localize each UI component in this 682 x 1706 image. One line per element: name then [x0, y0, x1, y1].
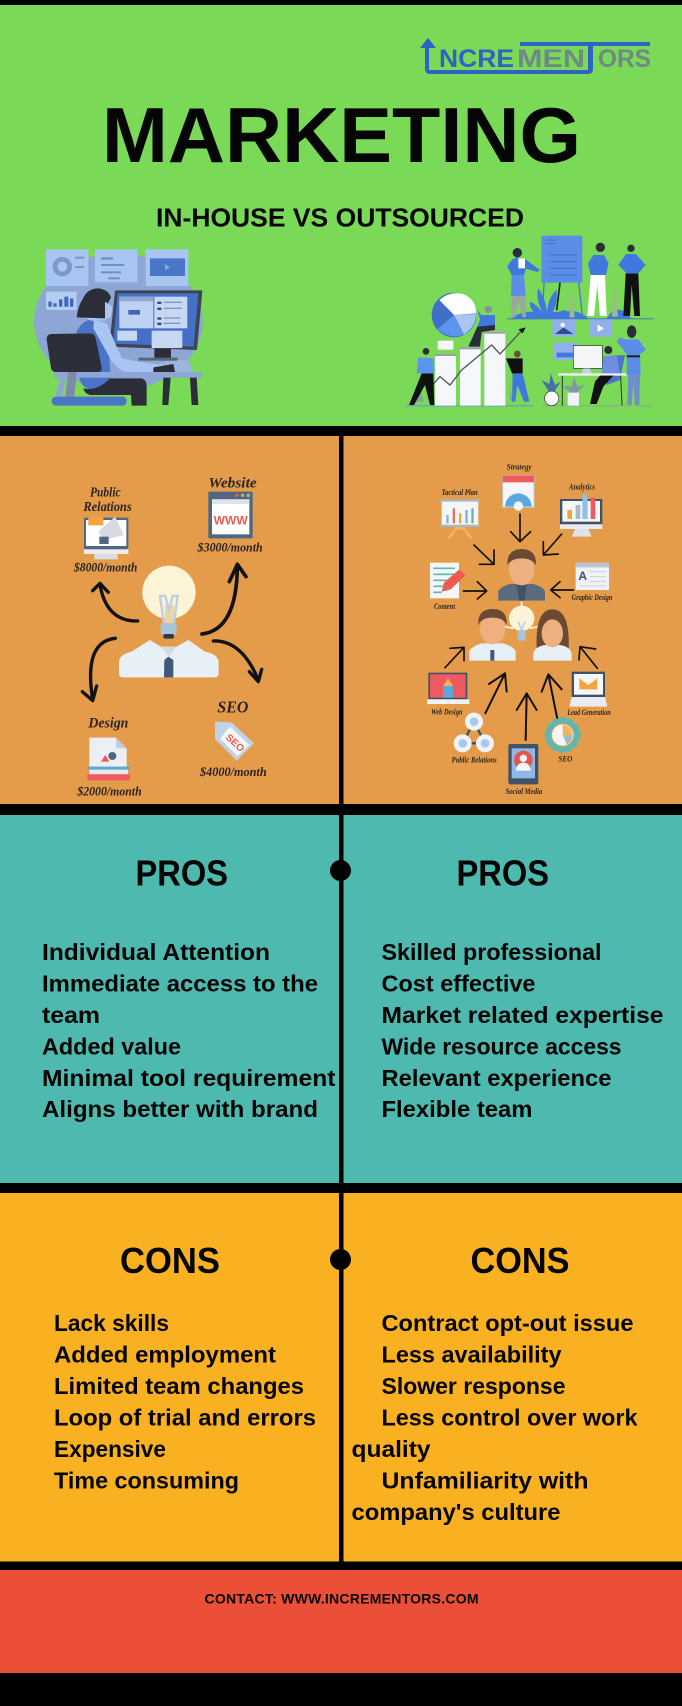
contact line: CONTACT: WWW.INCREMENTORS.COM [204, 1590, 478, 1606]
heading: in-house pros: PROS [136, 852, 228, 894]
label: public relations: $8000/month [73, 561, 137, 575]
list: in-house pros: team [42, 1002, 100, 1028]
icon: lead generation [567, 672, 611, 717]
list: outsourced cons: Contract opt-out issue [382, 1310, 634, 1336]
icon: SEO gear [546, 718, 580, 764]
list: outsourced pros: Market related expertise [382, 1002, 664, 1028]
list: outsourced cons: Less availability [382, 1342, 562, 1368]
label: SEO [199, 698, 267, 779]
label: website: $3000/month [197, 541, 263, 555]
illustration: growth chart team [406, 293, 533, 406]
icon: graphic design [572, 563, 612, 602]
icon: analytics: Analytics [568, 481, 595, 491]
icon: SEO gear: SEO [558, 754, 572, 764]
list: outsourced cons: Slower response [382, 1373, 566, 1399]
icon: strategy [503, 461, 534, 511]
panel: cons [0, 1193, 682, 1562]
panel: in-house cost diagram [0, 436, 339, 804]
logo: Incrementors [420, 38, 651, 74]
icon: web design: Web Design [431, 706, 463, 716]
icon: public relations: Public Relations [452, 754, 497, 764]
heading: in-house cons: CONS [120, 1240, 220, 1281]
illustration: team at whiteboard [507, 236, 653, 319]
list: outsourced cons: quality [352, 1436, 431, 1462]
label: design: Design [87, 716, 128, 732]
arrow: graphic design to manager [551, 582, 573, 598]
label: public relations: Relations [82, 499, 132, 514]
arrow: to website [202, 564, 246, 634]
arrow: content to manager [463, 582, 487, 599]
icon: tactical plan: Tactical Plan [442, 487, 478, 497]
icon: public relations [452, 713, 497, 764]
icon: content [430, 563, 465, 611]
label: website: Website [208, 475, 257, 491]
arrow: social media to team [517, 693, 537, 740]
arrow: public relations to team [485, 673, 507, 713]
arrow: web design to team [445, 647, 464, 668]
list: outsourced cons [352, 1310, 638, 1525]
label: design [76, 716, 142, 799]
arrow: to design [82, 638, 115, 701]
list: outsourced cons: Less control over work [382, 1404, 638, 1430]
panel: pros [0, 815, 682, 1183]
list: outsourced pros [382, 939, 664, 1122]
center divider with dots [330, 436, 351, 1562]
heading: outsourced pros: PROS [456, 852, 549, 894]
list: outsourced pros: Wide resource access [382, 1034, 622, 1060]
label: SEO: SEO [217, 698, 248, 717]
icon: strategy: Strategy [507, 461, 532, 471]
list: in-house pros: Individual Attention [42, 939, 270, 965]
arrow: tactical plan to manager [474, 545, 494, 564]
illustration: desk team [542, 319, 652, 406]
list: outsourced cons: Unfamiliarity with [382, 1468, 588, 1494]
label: public relations [73, 485, 137, 575]
icon: manager [498, 549, 545, 601]
illustration: woman at computer [34, 249, 203, 406]
icon: content: Content [434, 601, 455, 611]
icon: lightbulb [505, 602, 538, 641]
list: outsourced pros: Cost effective [382, 970, 536, 996]
icon: lead generation: Lead Generation [567, 707, 611, 717]
subtitle: IN-HOUSE VS OUTSOURCED [156, 202, 524, 232]
logo: Incrementors: MEN [517, 45, 585, 73]
icon: analytics [560, 481, 602, 537]
label: website: WWW [214, 514, 248, 528]
list: outsourced cons: company's culture [352, 1499, 560, 1525]
list: outsourced pros: Flexible team [382, 1096, 532, 1122]
logo: Incrementors: NCRE [439, 45, 514, 73]
icon: web design [427, 673, 469, 716]
arrow: analytics to manager [543, 534, 562, 555]
list: outsourced pros: Skilled professional [382, 939, 602, 965]
panel: footer [0, 1570, 682, 1673]
icon: social media: Social Media [506, 786, 543, 796]
list: in-house cons [54, 1310, 316, 1494]
label: SEO: $4000/month [199, 765, 267, 779]
icon: man [469, 609, 516, 661]
icon: graphic design: Graphic Design [572, 592, 612, 602]
list: in-house cons: Time consuming [54, 1468, 239, 1494]
list: in-house cons: Expensive [54, 1436, 166, 1462]
panel: outsourced team diagram [343, 436, 682, 804]
list: in-house pros [42, 939, 336, 1122]
list: in-house cons: Added employment [54, 1342, 276, 1368]
list: in-house cons: Loop of trial and errors [54, 1404, 316, 1430]
heading: outsourced cons: CONS [470, 1240, 570, 1281]
icon: social media [506, 744, 543, 796]
title: MARKETING [102, 91, 581, 179]
list: outsourced pros: Relevant experience [382, 1065, 612, 1091]
arrow: to public relations [93, 583, 138, 621]
panel: header [0, 5, 682, 426]
list: in-house pros: Immediate access to the [42, 970, 318, 996]
icon: bulb-headed person [119, 566, 219, 677]
label: public relations: Public [90, 485, 121, 500]
icon: tactical plan [440, 487, 480, 538]
arrow: lead generation to team [579, 647, 597, 668]
arrow: strategy to manager [511, 514, 531, 542]
list: in-house cons: Lack skills [54, 1310, 169, 1336]
icon: graphic design: A [578, 569, 587, 583]
list: in-house pros: Minimal tool requirement [42, 1065, 336, 1091]
label: SEO: SEO [223, 732, 246, 755]
logo: Incrementors: ORS [598, 45, 651, 73]
list: in-house pros: Added value [42, 1034, 181, 1060]
arrow: to SEO [213, 641, 262, 682]
icon: woman [533, 609, 572, 661]
arrow: SEO to team [542, 674, 562, 719]
list: in-house cons: Limited team changes [54, 1373, 304, 1399]
label: website [197, 475, 263, 555]
list: in-house pros: Aligns better with brand [42, 1096, 318, 1122]
label: design: $2000/month [76, 785, 142, 799]
